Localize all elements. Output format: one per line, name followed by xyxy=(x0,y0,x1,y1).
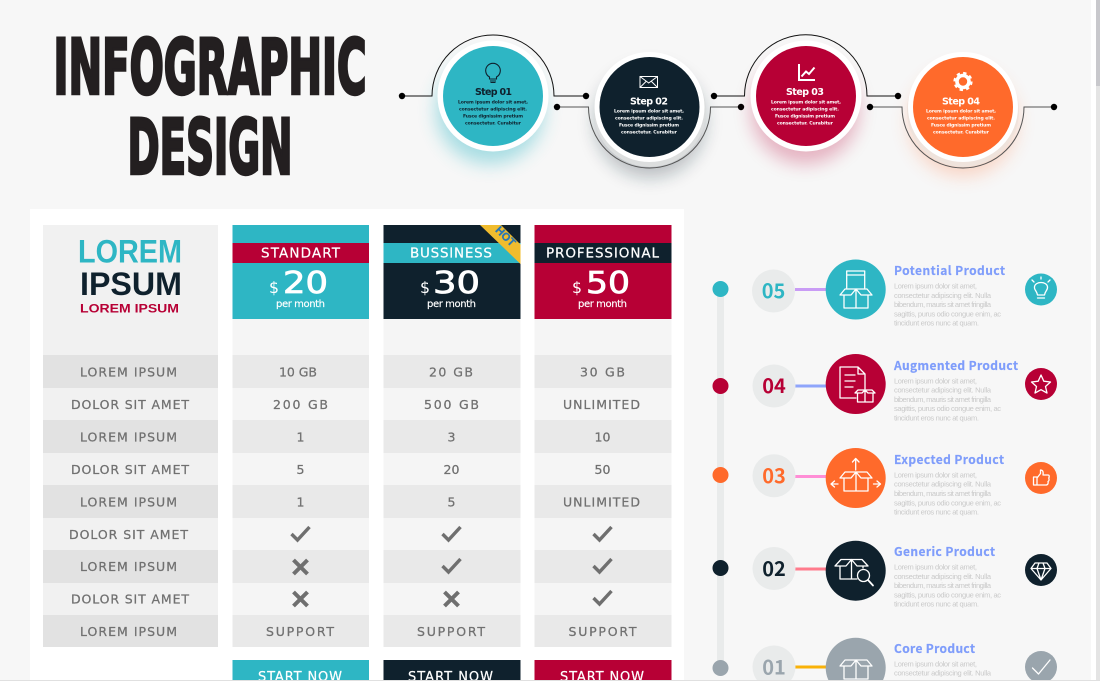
bussiness values: SUPPORT xyxy=(417,624,485,639)
plan: professional: 50 xyxy=(586,266,630,301)
step 04: Step 04 xyxy=(942,96,980,108)
level 04: Augmented Product xyxy=(893,357,1018,374)
level 01: Core Product xyxy=(894,640,975,657)
step 01 xyxy=(399,35,589,164)
level 02: sagittis, purus odio congue enim, ac xyxy=(894,590,1001,600)
level 02: Lorem ipsum dolor sit amet, xyxy=(894,562,977,572)
level 04: sagittis, purus odio congue enim, ac xyxy=(894,404,1001,413)
feature labels: DOLOR SIT AMET xyxy=(71,592,189,606)
level 04: tincidunt eros nunc at quam. xyxy=(894,414,979,422)
step 01: consectetur. Curabitur xyxy=(465,120,522,126)
level 02: Generic Product xyxy=(894,543,995,560)
feature labels: LOREM IPSUM xyxy=(80,364,177,380)
level 05: Lorem ipsum dolor sit amet, xyxy=(894,282,977,290)
step 02: Lorem ipsum dolor sit amet, xyxy=(614,108,684,114)
plan: standart: STANDART xyxy=(261,246,341,262)
standart values: 10 GB xyxy=(279,364,317,380)
bussiness values xyxy=(417,364,485,639)
standart values xyxy=(266,364,334,639)
bussiness values: 3 xyxy=(448,430,455,444)
bussiness values: 5 xyxy=(448,494,455,510)
professional values: 10 xyxy=(595,430,610,444)
step 04: Fusce dignissim pretium xyxy=(931,122,991,128)
feature labels: LOREM IPSUM xyxy=(80,494,177,510)
level 01 xyxy=(712,638,1057,681)
step 02: consectetur adipiscing elit. xyxy=(615,116,683,122)
panel: pricing table xyxy=(30,209,684,681)
level 04: consectetur adipiscing elit. Nulla xyxy=(894,386,992,394)
table logo: IPSUM xyxy=(80,266,182,302)
plan: professional: PROFESSIONAL xyxy=(546,246,659,262)
level 02 xyxy=(712,541,1057,608)
level 02: consectetur adipiscing elit. Nulla xyxy=(894,572,992,581)
table logo: LOREM xyxy=(78,234,182,270)
bussiness values: 20 xyxy=(444,462,459,477)
step 03: Step 03 xyxy=(786,87,824,98)
plan: professional: per month xyxy=(578,299,627,310)
plan: bussiness xyxy=(384,224,520,319)
vertical rail xyxy=(717,289,724,668)
step 02 xyxy=(554,52,744,177)
scrollbar xyxy=(1091,0,1100,681)
title: INFOGRAPHIC xyxy=(54,22,366,111)
step 04: Lorem ipsum dolor sit amet, xyxy=(926,108,996,114)
plan: bussiness: $ xyxy=(420,278,430,297)
professional values xyxy=(563,364,640,639)
level 01: 01 xyxy=(762,652,786,680)
step 04: consectetur. Curabitur xyxy=(933,130,990,136)
level 03 xyxy=(712,448,1057,516)
professional values: SUPPORT xyxy=(568,624,637,639)
step 01: Lorem ipsum dolor sit amet, xyxy=(458,100,528,106)
title: DESIGN xyxy=(128,102,292,191)
professional values: UNLIMITED xyxy=(563,397,640,412)
level 01: Lorem ipsum dolor sit amet, xyxy=(894,660,977,668)
standart values: SUPPORT xyxy=(266,624,334,639)
bottom edge line xyxy=(0,680,1100,681)
step 02: Fusce dignissim pretium xyxy=(619,122,679,128)
level 04: 04 xyxy=(762,370,786,399)
step 02: Step 02 xyxy=(630,96,668,108)
bussiness values: 20 GB xyxy=(429,364,473,380)
level 05: Potential Product xyxy=(894,262,1005,279)
standart values: 1 xyxy=(297,430,304,444)
plan: standart: $ xyxy=(269,278,279,297)
plan: bussiness: 30 xyxy=(433,266,480,301)
step 03: consectetur. Curabitur xyxy=(777,120,834,126)
level 04: Lorem ipsum dolor sit amet, xyxy=(894,376,977,386)
plan: bussiness: per month xyxy=(427,299,476,310)
professional values: UNLIMITED xyxy=(563,494,640,510)
feature labels: LOREM IPSUM xyxy=(80,430,177,444)
level 05: bibendum, mauris sit amet fringilla xyxy=(894,300,992,309)
step 04: consectetur adipiscing elit. xyxy=(927,116,995,122)
level 02: 02 xyxy=(762,553,786,582)
step 03: consectetur adipiscing elit. xyxy=(771,106,839,112)
table logo: LOREM IPSUM xyxy=(80,304,179,316)
step 02: consectetur. Curabitur xyxy=(621,130,678,136)
level 03: bibendum, mauris sit amet fringilla xyxy=(894,489,992,498)
level 02: tincidunt eros nunc at quam. xyxy=(894,600,979,608)
step 03: Lorem ipsum dolor sit amet, xyxy=(771,100,841,106)
level 03: Expected Product xyxy=(894,451,1004,468)
level 03: Lorem ipsum dolor sit amet, xyxy=(894,470,977,480)
step 04 xyxy=(867,52,1057,176)
level 03: tincidunt eros nunc at quam. xyxy=(894,508,979,516)
feature labels: DOLOR SIT AMET xyxy=(71,462,189,477)
professional values: 50 xyxy=(595,462,610,477)
feature labels: LOREM IPSUM xyxy=(80,559,177,574)
step 03 xyxy=(711,35,901,164)
plan: bussiness: BUSSINESS xyxy=(410,246,492,262)
level 05 xyxy=(712,260,1057,328)
bussiness values: 500 GB xyxy=(424,397,479,412)
step 01: Step 01 xyxy=(475,87,512,98)
step 03: Fusce dignissim pretium xyxy=(775,114,835,120)
level 03: 03 xyxy=(762,460,786,489)
level 05: 05 xyxy=(762,275,785,304)
table logo xyxy=(78,234,182,316)
feature labels xyxy=(69,364,189,639)
step 01: consectetur adipiscing elit. xyxy=(459,106,527,112)
level 02: bibendum, mauris sit amet fringilla xyxy=(894,581,992,590)
level 05: tincidunt eros nunc at quam. xyxy=(894,318,979,328)
level 03: sagittis, purus odio congue enim, ac xyxy=(894,498,1001,508)
step 01: Fusce dignissim pretium xyxy=(463,114,523,120)
feature labels: DOLOR SIT AMET xyxy=(71,397,189,412)
plan: professional: $ xyxy=(572,278,582,297)
feature labels: DOLOR SIT AMET xyxy=(69,527,188,542)
standart values: 200 GB xyxy=(273,397,328,412)
step timeline xyxy=(399,35,1057,177)
plan: standart: per month xyxy=(276,299,325,310)
standart values: 1 xyxy=(297,494,304,510)
standart values: 5 xyxy=(297,462,304,477)
level 01: consectetur adipiscing elit. Nulla xyxy=(894,668,992,678)
level 05: consectetur adipiscing elit. Nulla xyxy=(894,291,992,300)
start now buttons xyxy=(232,660,672,681)
hot ribbon: HOT xyxy=(493,224,518,249)
plan: standart xyxy=(232,225,369,319)
level 03: consectetur adipiscing elit. Nulla xyxy=(894,480,992,488)
product levels timeline xyxy=(712,260,1057,681)
professional values: 30 GB xyxy=(580,364,625,380)
row backgrounds xyxy=(43,225,672,647)
feature labels: LOREM IPSUM xyxy=(80,624,177,639)
level 04 xyxy=(712,354,1057,422)
plan: standart: 20 xyxy=(283,266,328,301)
level 05: sagittis, purus odio congue enim, ac xyxy=(894,310,1001,318)
level 04: bibendum, mauris sit amet fringilla xyxy=(894,395,992,404)
plan: professional xyxy=(534,225,672,319)
title xyxy=(54,22,366,191)
